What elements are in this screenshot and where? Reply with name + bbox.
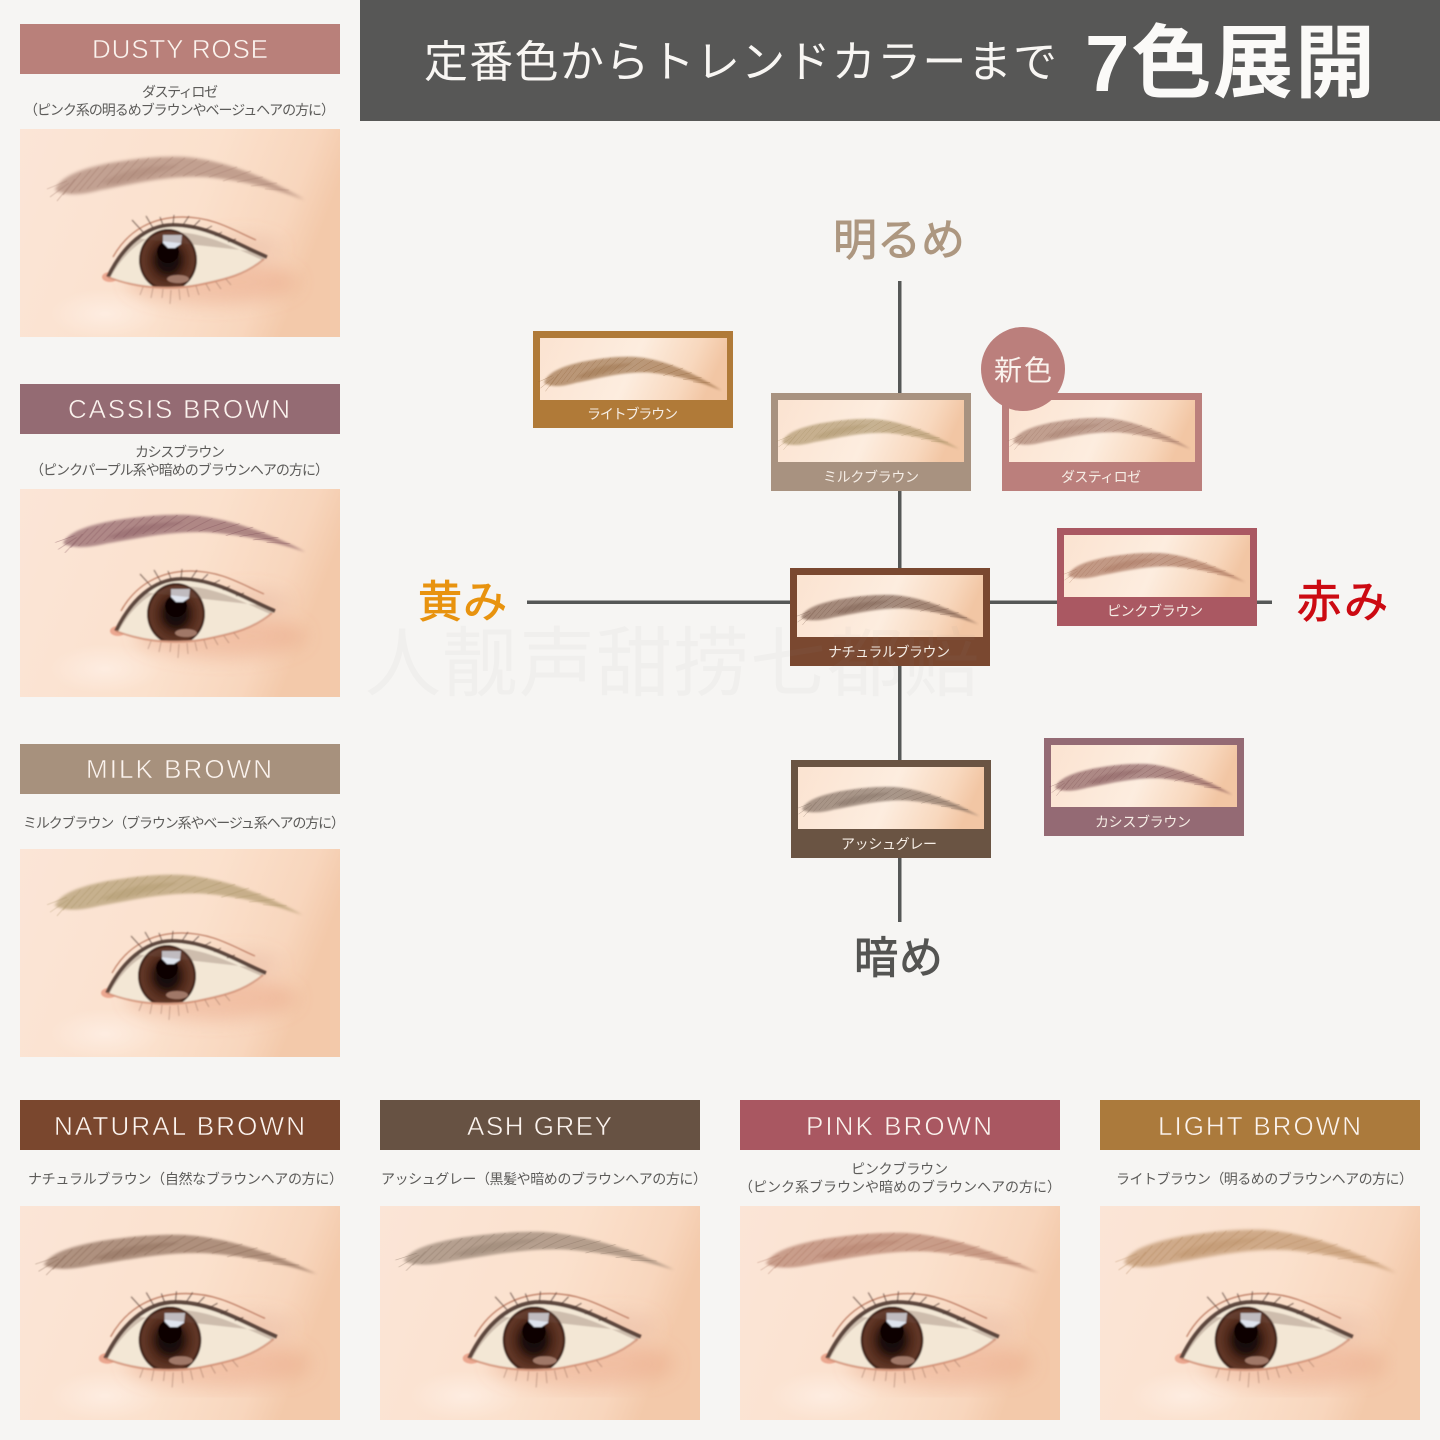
swatch: pink brown bbox=[1057, 528, 1257, 626]
panel: natural brown bbox=[20, 1100, 343, 1421]
photo: ash grey eye bbox=[380, 1206, 700, 1420]
caption: dusty rose: （ピンク系の明るめブラウンやベージュヘアの方に） bbox=[24, 102, 335, 118]
caption: dusty rose bbox=[24, 84, 335, 118]
header subtitle: 定番色からトレンドカラーまで bbox=[424, 38, 1057, 87]
panel: cassis brown bbox=[20, 384, 340, 697]
caption: pink brown: ピンクブラウン bbox=[851, 1161, 948, 1177]
caption: ash grey: アッシュグレー（黒髪や暗めのブラウンヘアの方に） bbox=[381, 1171, 707, 1187]
caption: milk brown: ミルクブラウン（ブラウン系やベージュ系ヘアの方に） bbox=[23, 815, 345, 831]
photo: cassis brown eye bbox=[20, 489, 340, 697]
heading: NATURAL BROWN bbox=[20, 1100, 340, 1150]
photo: natural brown eye bbox=[20, 1206, 340, 1420]
caption: cassis brown bbox=[30, 444, 329, 478]
heading: PINK BROWN: PINK BROWN bbox=[806, 1111, 992, 1141]
heading: ASH GREY bbox=[380, 1100, 700, 1150]
axis label: dark: 暗め bbox=[854, 934, 943, 983]
caption: pink brown bbox=[739, 1161, 1061, 1195]
swatch: milk brown: ミルクブラウン bbox=[823, 469, 919, 485]
heading: CASSIS BROWN: CASSIS BROWN bbox=[68, 394, 290, 424]
photo: pink brown eye bbox=[740, 1206, 1060, 1420]
swatch: dusty rose: ダスティロゼ bbox=[1061, 469, 1141, 485]
heading: PINK BROWN bbox=[740, 1100, 1060, 1150]
swatch: ash grey bbox=[791, 760, 991, 858]
swatch: natural brown bbox=[790, 568, 990, 666]
header banner bbox=[360, 0, 1440, 121]
heading: DUSTY ROSE: DUSTY ROSE bbox=[92, 34, 268, 64]
heading: NATURAL BROWN: NATURAL BROWN bbox=[54, 1111, 305, 1141]
heading: MILK BROWN: MILK BROWN bbox=[86, 754, 272, 784]
header emphasis: 7色展開 bbox=[1085, 19, 1375, 108]
swatch: cassis brown bbox=[1044, 738, 1244, 836]
swatch: ash grey: アッシュグレー bbox=[841, 836, 937, 852]
axis label: red: 赤み bbox=[1297, 578, 1388, 627]
badge: new color bbox=[981, 327, 1065, 411]
panel: milk brown bbox=[20, 744, 345, 1059]
caption: cassis brown: カシスブラウン bbox=[135, 444, 225, 460]
heading: DUSTY ROSE bbox=[20, 24, 340, 74]
heading: LIGHT BROWN: LIGHT BROWN bbox=[1158, 1111, 1361, 1141]
caption: dusty rose: ダスティロゼ bbox=[142, 84, 218, 100]
color position chart bbox=[418, 216, 1388, 983]
heading: CASSIS BROWN bbox=[20, 384, 340, 434]
photo: milk brown eye bbox=[20, 849, 340, 1057]
caption: natural brown: ナチュラルブラウン（自然なブラウンヘアの方に） bbox=[28, 1171, 343, 1187]
swatch: light brown: ライトブラウン bbox=[587, 406, 678, 422]
panel: light brown bbox=[1100, 1100, 1420, 1421]
swatch: cassis brown: カシスブラウン bbox=[1095, 814, 1191, 830]
swatch: milk brown bbox=[771, 393, 971, 491]
swatch: natural brown: ナチュラルブラウン bbox=[828, 644, 950, 660]
panel: pink brown bbox=[739, 1100, 1061, 1421]
panel: dusty rose bbox=[20, 24, 340, 339]
panel: ash grey bbox=[380, 1100, 707, 1421]
caption: cassis brown: （ピンクパープル系や暗めのブラウンヘアの方に） bbox=[30, 462, 329, 478]
caption: light brown: ライトブラウン（明るめのブラウンヘアの方に） bbox=[1116, 1171, 1413, 1187]
photo: dusty rose eye bbox=[20, 129, 340, 337]
heading: LIGHT BROWN bbox=[1100, 1100, 1420, 1150]
photo: light brown eye bbox=[1100, 1206, 1420, 1420]
axis label: bright: 明るめ bbox=[833, 216, 965, 265]
heading: MILK BROWN bbox=[20, 744, 340, 794]
axis label: yellow: 黄み bbox=[418, 578, 507, 627]
heading: ASH GREY: ASH GREY bbox=[467, 1111, 612, 1141]
swatch: pink brown: ピンクブラウン bbox=[1107, 603, 1203, 619]
caption: pink brown: （ピンク系ブラウンや暗めのブラウンヘアの方に） bbox=[739, 1179, 1061, 1195]
watermark: 人靓声甜捞七都赔 bbox=[365, 622, 980, 707]
badge: new color: 新色 bbox=[994, 355, 1052, 386]
swatch: light brown bbox=[533, 331, 733, 428]
axis lines bbox=[527, 281, 1272, 922]
swatch: dusty rose bbox=[1002, 393, 1202, 491]
